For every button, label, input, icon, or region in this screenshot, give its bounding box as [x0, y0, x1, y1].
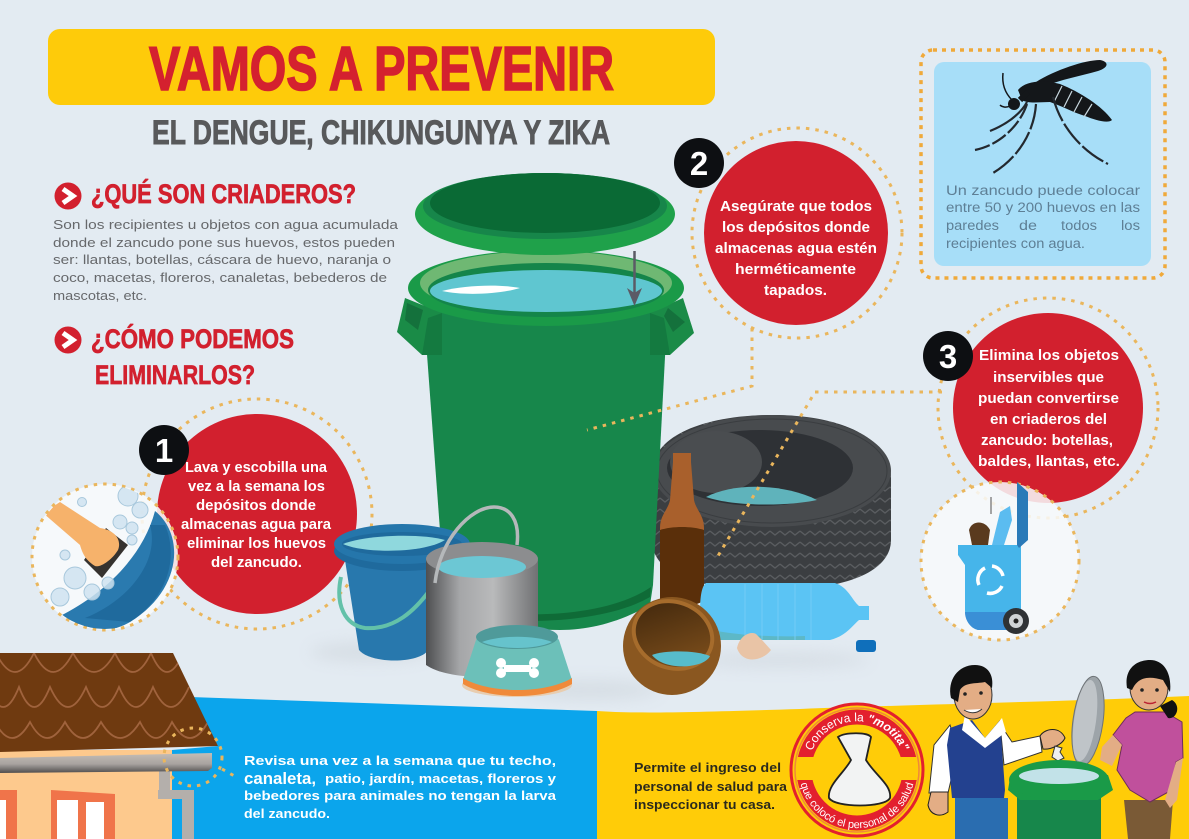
floor shadows	[310, 643, 870, 699]
step 3 text: Elimina los objetos	[979, 348, 1119, 364]
yellow band text: personal de salud para	[634, 779, 788, 794]
panel: mosquito fact	[921, 50, 1165, 278]
man head	[950, 665, 992, 719]
step 1: washing	[32, 399, 372, 631]
eggshell	[737, 633, 771, 660]
text block: criaderos definition: Son los recipientes u objetos con agua acumulada	[53, 217, 399, 232]
step 2 text: tapados.	[764, 283, 827, 299]
icon: bone	[496, 658, 539, 678]
text block: criaderos definition: donde el zancudo pone sus huevos, estos pueden	[53, 235, 395, 250]
badge bottom text: que colocó el personal de salud	[800, 782, 914, 830]
bin handles	[397, 298, 694, 355]
icon: hand scrubbing basin	[32, 484, 178, 631]
step 2 text: Asegúrate que todos	[720, 199, 872, 215]
mosquito text: los	[1121, 218, 1140, 233]
window left	[0, 790, 17, 839]
text block: criaderos definition	[53, 217, 399, 303]
heading: eliminarlos: ¿CÓMO PODEMOS	[91, 323, 294, 354]
paint can	[426, 507, 538, 677]
man trousers	[955, 798, 1008, 839]
heading: eliminarlos	[91, 323, 294, 390]
number badge 1	[139, 425, 189, 475]
blue band text: canaleta,	[244, 769, 316, 788]
connector: gutter to text	[222, 769, 238, 778]
blue bucket	[334, 524, 470, 660]
title banner: VAMOS A PREVENIR	[149, 35, 614, 104]
downspout	[158, 768, 194, 839]
red circle step 1	[157, 414, 357, 614]
icon: chevron bullet	[54, 182, 82, 210]
step 3: discard	[921, 298, 1158, 640]
mosquito text: paredes	[946, 218, 999, 233]
bin rim and water	[408, 250, 684, 326]
red circle step 3	[953, 313, 1143, 503]
house wall	[0, 750, 172, 839]
dotted ring step 3	[938, 298, 1158, 518]
character: man	[928, 665, 1065, 839]
main green bin	[397, 173, 694, 630]
beer bottle	[660, 453, 704, 606]
mosquito text: entre 50 y 200 huevos en las	[946, 200, 1140, 215]
window right	[51, 790, 115, 839]
mosquito text: de	[1019, 218, 1037, 233]
mosquito text: recipientes con agua.	[946, 236, 1085, 251]
step 1 text: depósitos donde	[196, 498, 316, 514]
yellow band text: Permite el ingreso del	[634, 760, 781, 775]
icon: recycling bin	[921, 482, 1079, 640]
subtitle: EL DENGUE, CHIKUNGUNYA Y ZIKA	[152, 114, 610, 152]
bin lid	[415, 173, 675, 255]
step 3 text: en criaderos del	[990, 412, 1107, 428]
step 2 text: los depósitos donde	[722, 220, 870, 236]
lid held up	[1067, 674, 1109, 768]
plastic bottle	[700, 583, 869, 640]
mosquito text	[946, 183, 1141, 251]
icon: mosquito	[975, 60, 1112, 173]
yellow band text	[634, 760, 788, 812]
section: que son criaderos	[53, 178, 399, 303]
red circle step 2	[704, 141, 888, 325]
house	[0, 653, 218, 839]
step 1 text: del zancudo.	[211, 555, 302, 571]
woman head	[1127, 660, 1177, 718]
panel: yellow band	[597, 696, 1189, 839]
text block: criaderos definition: ser: llantas, botellas, cáscara de huevo, naranja o	[53, 252, 391, 267]
blue band text: del zancudo.	[244, 806, 330, 821]
section: como eliminarlos	[54, 323, 294, 390]
dog bowl	[462, 625, 572, 697]
bottle cap	[856, 640, 876, 652]
step 2: covered	[674, 128, 902, 338]
connector: step 2 to bin	[587, 328, 752, 430]
gutter	[0, 753, 212, 773]
dotted ring: gutter	[164, 728, 222, 786]
step 3 text: inservibles que	[993, 370, 1104, 386]
woman trousers	[1124, 800, 1173, 839]
man arms and shirt	[928, 724, 1065, 815]
dotted ring step 1	[142, 399, 372, 629]
blue band text: bebedores para animales no tengan la larva	[244, 788, 557, 803]
woman arms	[1100, 735, 1183, 808]
text block: criaderos definition: mascotas, etc.	[53, 288, 147, 303]
icon: chevron bullet two	[54, 326, 82, 354]
step 3 text: zancudo: botellas,	[981, 433, 1113, 449]
panel: blue band	[172, 697, 597, 839]
woman shirt	[1113, 712, 1183, 802]
blue band text: Revisa una vez a la semana que tu techo,	[244, 753, 556, 768]
roof	[0, 653, 218, 752]
step 3 text: puedan convertirse	[978, 391, 1119, 407]
connector: step 3 to tire	[718, 392, 942, 556]
number badge 2: 2	[690, 145, 708, 182]
mosquito text: todos	[1061, 218, 1097, 233]
small green bin	[1008, 760, 1113, 839]
number badge 3	[923, 331, 973, 381]
badge top text: Conserva la "motita"	[806, 712, 910, 750]
step 3 text: baldes, llantas, etc.	[978, 454, 1120, 470]
step 1 text	[181, 460, 332, 571]
heading: criaderos: ¿QUÉ SON CRIADEROS?	[91, 178, 356, 209]
blue band text: patio, jardín, macetas, floreros y	[325, 771, 557, 786]
badge: motita	[790, 702, 924, 838]
text block: criaderos definition: coco, macetas, floreros, canaletas, bebederos de	[53, 270, 387, 285]
man collar	[962, 715, 1006, 748]
small tied bag	[1052, 746, 1064, 761]
coconut shell	[622, 588, 724, 695]
number badge 1: 1	[155, 432, 173, 469]
bin body	[423, 300, 668, 630]
step 2 text	[715, 199, 877, 299]
step 2 text: herméticamente	[735, 262, 856, 278]
arrow: lid down	[627, 251, 642, 306]
mosquito text: Un zancudo puede colocar	[946, 183, 1141, 198]
tire	[652, 415, 891, 590]
number badge 2	[674, 138, 724, 188]
number badge 3: 3	[939, 338, 957, 375]
character: woman	[1100, 660, 1183, 839]
icon: recycling arrows	[978, 566, 1003, 593]
blue band text	[244, 753, 557, 821]
step 3 text	[978, 348, 1120, 470]
man vest	[947, 720, 1005, 798]
step 1 text: almacenas agua para	[181, 517, 332, 533]
dotted ring step 2	[692, 128, 902, 338]
yellow band text: inspeccionar tu casa.	[634, 797, 775, 812]
step 1 text: Lava y escobilla una	[185, 460, 328, 476]
step 1 text: eliminar los huevos	[187, 536, 326, 552]
step 2 text: almacenas agua estén	[715, 241, 877, 257]
heading: eliminarlos: ELIMINARLOS?	[95, 360, 255, 390]
step 1 text: vez a la semana los	[188, 479, 325, 495]
icon: tied bag	[829, 733, 890, 806]
